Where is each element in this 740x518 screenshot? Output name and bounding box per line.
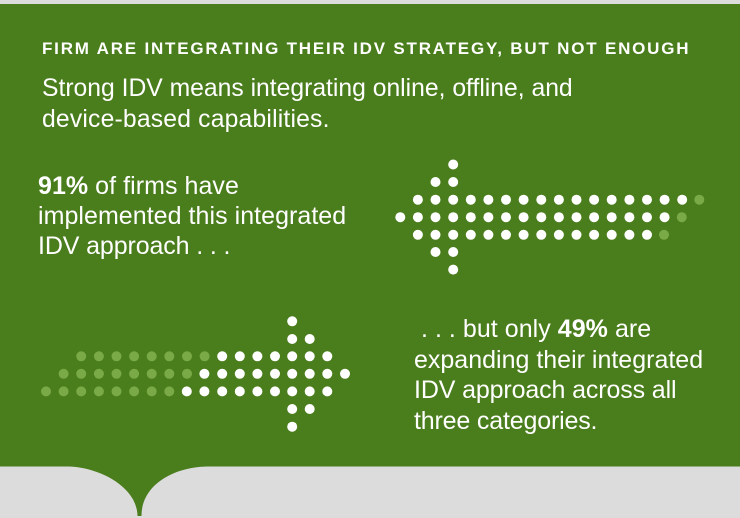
text: 49% expanding: . . . but only 49% are (421, 315, 651, 343)
text: 49% expanding: expanding their integrated (414, 346, 703, 374)
text: 91% of firms: IDV approach . . . (38, 232, 230, 260)
heading: FIRM ARE INTEGRATING THEIR IDV STRATEGY, BUT NOT ENOUGH (42, 39, 690, 58)
text: 49% expanding (414, 315, 703, 435)
text: 49% expanding: three categories. (414, 407, 597, 435)
intro text: device-based capabilities. (42, 106, 330, 133)
text: 91% of firms: 91% of firms have (38, 172, 239, 200)
intro text: Strong IDV means integrating online, offline, and (42, 75, 573, 102)
text: 91% of firms (38, 172, 346, 260)
intro text (42, 75, 573, 133)
text: 49% expanding: IDV approach across all (414, 376, 676, 404)
text: 91% of firms: implemented this integrated (38, 202, 346, 230)
